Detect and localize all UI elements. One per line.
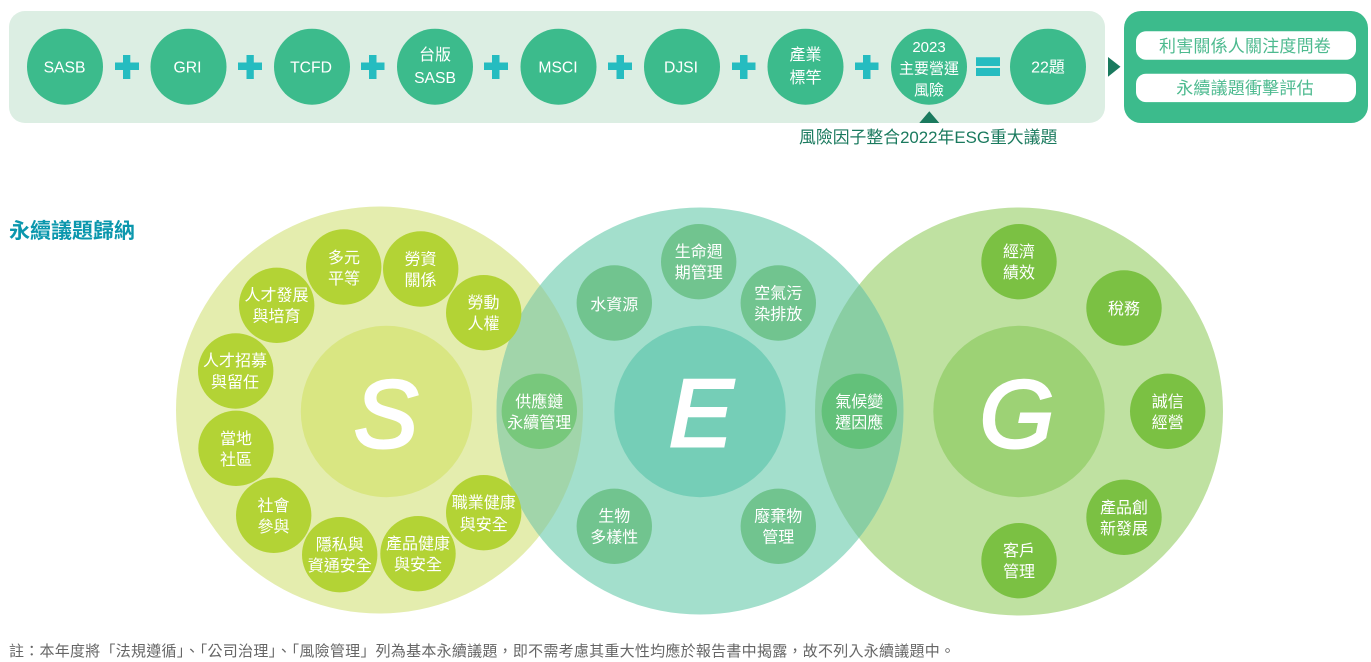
social topics: [198, 229, 577, 592]
pill: stakeholder survey: 利害關係人關注度問卷: [1159, 36, 1331, 56]
heading: topic grouping: 永續議題歸納: [9, 220, 135, 243]
topic: labor rights: 勞動: [467, 294, 500, 312]
environmental topics: [577, 224, 897, 564]
E and G overlap: [815, 284, 904, 538]
topic: labor relations: [383, 231, 458, 307]
circle: MSCI: [520, 29, 596, 105]
topic: supply chain sustainability: [502, 374, 577, 449]
topic: product health and safety: 產品健康: [386, 535, 450, 553]
equals icon: [976, 57, 1000, 76]
pill: impact assessment: 永續議題衝擊評估: [1176, 79, 1314, 98]
panel: framework sources formula: [9, 11, 1105, 123]
topic: product lifecycle management: 生命週: [675, 243, 723, 261]
circle: 22 topics: [1010, 29, 1086, 105]
topic: climate change response: 氣候變: [835, 393, 883, 411]
circle: industry benchmark: 產業: [789, 46, 822, 64]
G letter: G: [980, 361, 1054, 468]
E outer circle: [496, 208, 904, 614]
topic: customer management: 管理: [1003, 562, 1035, 581]
topic: waste management: [741, 489, 816, 564]
circle: DJSI: DJSI: [664, 60, 698, 76]
E inner circle: [614, 326, 786, 497]
topic: product health and safety: [380, 516, 456, 591]
topic: water resources: [577, 265, 652, 341]
topic: labor rights: 人權: [467, 315, 500, 333]
topic: product lifecycle management: [661, 224, 736, 299]
topic: product innovation: 產品創: [1100, 499, 1148, 517]
topic: supply chain sustainability: 供應鏈: [515, 392, 563, 411]
circle: 2023 operational risks: 風險: [914, 82, 944, 99]
panel: S social circle: [176, 206, 583, 614]
G outer circle: [815, 208, 1223, 616]
circle: Taiwan SASB: SASB: [414, 70, 456, 87]
topic: talent recruitment: 與留任: [211, 374, 259, 392]
panel: outputs: [1124, 11, 1368, 123]
panel background: [1124, 11, 1368, 123]
topic: economic performance: [981, 224, 1057, 299]
circle: MSCI: MSCI: [538, 60, 578, 76]
topic: labor relations: 勞資: [404, 250, 437, 268]
topic: economic performance: 經濟: [1003, 243, 1035, 261]
circle: SASB: [27, 29, 103, 105]
topic: social participation: [236, 478, 311, 553]
topic: diversity and equality: 多元: [328, 249, 360, 267]
topic: local community: 當地: [220, 430, 252, 448]
topic: privacy and information security: [302, 517, 377, 592]
panel background: [9, 11, 1105, 123]
panel: G governance circle: [815, 208, 1223, 616]
plus icon: [115, 55, 139, 79]
circle: SASB: SASB: [44, 60, 85, 76]
topic: integrity: 經營: [1152, 414, 1184, 432]
circle: 2023 operational risks: 主要營運: [899, 60, 959, 78]
circle: industry benchmark: 標竿: [789, 69, 822, 87]
topic: air pollution emissions: 染排放: [754, 306, 802, 324]
topic: biodiversity: [577, 489, 652, 564]
topic: water resources: 水資源: [590, 296, 638, 314]
plus icon: [484, 55, 508, 79]
plus icon: [732, 55, 756, 79]
S and E overlap: [496, 285, 583, 536]
pill: stakeholder survey: [1136, 31, 1356, 60]
topic: integrity: [1130, 374, 1205, 449]
circle: 22 topics: 22題: [1031, 60, 1065, 76]
circle: 2023 operational risks: [891, 29, 967, 105]
plus icon: [608, 55, 632, 79]
topic: biodiversity: 多樣性: [590, 528, 638, 546]
E letter: E: [669, 360, 734, 467]
topic: talent recruitment: [198, 333, 273, 409]
topic: economic performance: 績效: [1003, 264, 1035, 282]
topic: diversity and equality: [306, 229, 381, 305]
pointer triangle: [919, 111, 939, 123]
topic: labor rights: [446, 275, 521, 350]
circle: TCFD: [274, 29, 350, 105]
topic: biodiversity: 生物: [598, 508, 630, 526]
topic: supply chain sustainability: 永續管理: [507, 413, 571, 432]
circle: TCFD: TCFD: [290, 60, 332, 76]
S outer circle: [176, 206, 583, 614]
topic: air pollution emissions: [741, 265, 816, 341]
circle: Taiwan SASB: 台版: [419, 46, 451, 64]
circle: 2023 operational risks: 2023: [912, 39, 946, 56]
topic: local community: 社區: [220, 451, 252, 469]
S inner circle: [301, 326, 472, 497]
topic: occupational health and safety: 職業健康: [452, 494, 516, 512]
footnote: 註：本年度將「法規遵循」、「公司治理」、「風險管理」列為基本永續議題，即不需考慮其重大性均應於報告書中揭露，故不列入永續議題中。: [9, 642, 955, 660]
caption: risk factors note: 風險因子整合2022年ESG重大議題: [799, 128, 1057, 147]
circle: DJSI: [644, 29, 720, 105]
topic: product lifecycle management: 期管理: [675, 263, 723, 282]
topic: occupational health and safety: [446, 475, 521, 550]
plus icon: [361, 55, 384, 79]
plus icon: [238, 55, 262, 79]
circle: GRI: GRI: [174, 60, 201, 76]
topic: waste management: 廢棄物: [754, 506, 802, 526]
topic: talent development: [239, 268, 314, 343]
pill: impact assessment: [1136, 74, 1356, 102]
topic: climate change response: [822, 374, 897, 449]
topic: product innovation: [1086, 480, 1162, 555]
topic: diversity and equality: 平等: [328, 269, 360, 288]
circle: GRI: [150, 29, 226, 105]
topic: product innovation: 新發展: [1100, 520, 1148, 538]
topic: social participation: 社會: [257, 497, 290, 515]
topic: privacy and information security: 資通安全: [308, 557, 372, 575]
topic: local community: [198, 411, 274, 486]
topic: climate change response: 遷因應: [835, 413, 883, 432]
circle: industry benchmark: [768, 29, 844, 105]
topic: occupational health and safety: 與安全: [460, 516, 508, 534]
topic: talent recruitment: 人才招募: [203, 352, 267, 370]
panel: E environmental circle: [496, 208, 904, 614]
topic: waste management: 管理: [762, 528, 794, 546]
topic: integrity: 誠信: [1152, 393, 1184, 411]
G inner circle: [933, 326, 1105, 497]
circle: Taiwan SASB: [397, 29, 473, 105]
governance topics: [981, 224, 1205, 598]
S letter: S: [354, 361, 418, 468]
topic: tax: 稅務: [1108, 300, 1140, 318]
arrow to outputs: [1108, 57, 1120, 77]
topic: labor relations: 關係: [404, 270, 437, 290]
plus icon: [855, 55, 878, 79]
topic: social participation: 參與: [257, 518, 290, 536]
topic: tax: [1086, 270, 1162, 346]
topic: customer management: [981, 523, 1057, 598]
topic: talent development: 與培育: [252, 306, 301, 326]
topic: product health and safety: 與安全: [394, 556, 442, 574]
topic: air pollution emissions: 空氣污: [754, 284, 802, 302]
topic: talent development: 人才發展: [244, 286, 309, 304]
topic: customer management: 客戶: [1003, 542, 1035, 560]
topic: privacy and information security: 隱私與: [316, 536, 364, 554]
